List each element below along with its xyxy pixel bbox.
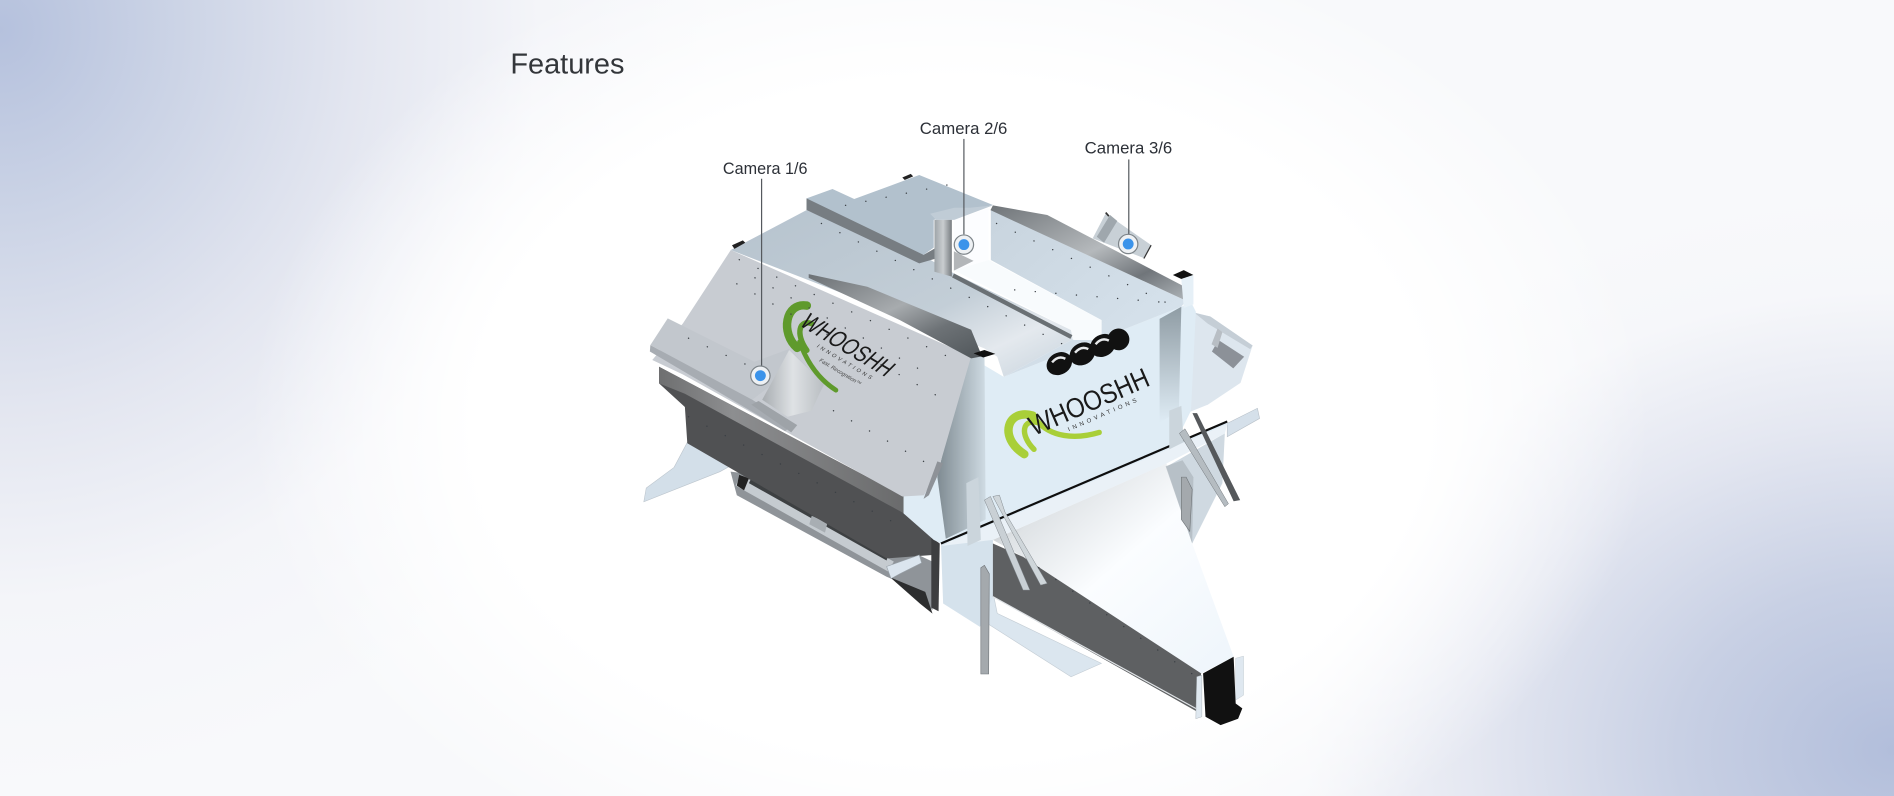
left front flange <box>966 477 981 546</box>
top plate edge <box>807 198 936 263</box>
right mount bracket <box>1227 408 1260 437</box>
left slanted panel <box>652 250 971 496</box>
camera 2 post <box>934 220 952 277</box>
rail black line <box>941 422 1227 544</box>
callout: Camera 2/6 <box>920 120 1007 254</box>
body corner below panel <box>904 465 972 544</box>
post shadow <box>954 251 974 271</box>
camera 1 chute <box>762 350 824 417</box>
panel end cap <box>924 461 943 499</box>
lower drawer rail <box>731 472 933 614</box>
machine illustration <box>644 174 1260 725</box>
lower right bracket plate <box>945 592 1101 677</box>
black corner caps <box>732 174 1193 358</box>
dark hopper band <box>659 367 940 611</box>
funnel outlet <box>1196 656 1244 725</box>
marker <box>1119 234 1138 254</box>
diagonal straps left <box>984 495 1047 590</box>
diagonal straps right <box>1179 413 1240 507</box>
vertical strap right <box>1181 477 1192 531</box>
logo: rear panel green swoosh <box>787 305 836 390</box>
marker <box>751 366 770 385</box>
raised top plate <box>807 175 993 255</box>
leader line <box>761 179 763 366</box>
callout: Camera 1/6 <box>723 160 807 385</box>
main front face <box>941 302 1227 544</box>
lower box under rail <box>941 534 993 627</box>
rivets <box>689 181 1196 676</box>
channel rail <box>953 275 1071 337</box>
logo: panel wordmark: Fast. Recognition™ <box>817 358 862 387</box>
vertical strap left <box>981 565 989 674</box>
white wall <box>954 208 989 270</box>
wall strip <box>990 205 1186 301</box>
rear right wing <box>1178 312 1253 417</box>
callout: Camera 3/6 <box>1085 139 1172 254</box>
front lower bracket <box>887 555 922 579</box>
logo: front green swoosh <box>1008 414 1099 454</box>
centre wedge <box>809 274 982 358</box>
right flange <box>1169 406 1184 449</box>
camera 1 flap <box>650 318 825 431</box>
label: Camera 3/6 <box>1085 139 1172 157</box>
left mount bracket <box>644 438 732 502</box>
rear camera bracket <box>1093 213 1151 258</box>
chute support <box>751 401 797 432</box>
face right column <box>1160 307 1181 423</box>
leader line <box>1128 159 1130 234</box>
funnel top <box>993 463 1234 673</box>
right lower box <box>1166 433 1225 544</box>
logo: panel wordmark: INNOVATIONS <box>815 344 875 382</box>
rail light strip <box>941 424 1227 546</box>
leader line <box>963 139 965 234</box>
funnel dark side <box>993 544 1201 711</box>
label: Camera 1/6 <box>723 160 807 178</box>
logo: panel wordmark: WHOOSHH <box>794 310 900 381</box>
label: Camera 2/6 <box>920 120 1007 138</box>
face left strip <box>937 350 986 539</box>
logo: front wordmark: WHOOSHH <box>1024 362 1154 442</box>
marker <box>954 235 974 254</box>
heading: Features: Features <box>510 49 624 81</box>
top deck <box>731 210 1073 377</box>
black vents <box>1042 325 1133 380</box>
white channel <box>954 260 1101 340</box>
right deck <box>991 210 1186 377</box>
white seam line <box>993 597 1197 709</box>
top plate lip <box>930 205 993 220</box>
logo: front wordmark: INNOVATIONS <box>1067 397 1141 433</box>
